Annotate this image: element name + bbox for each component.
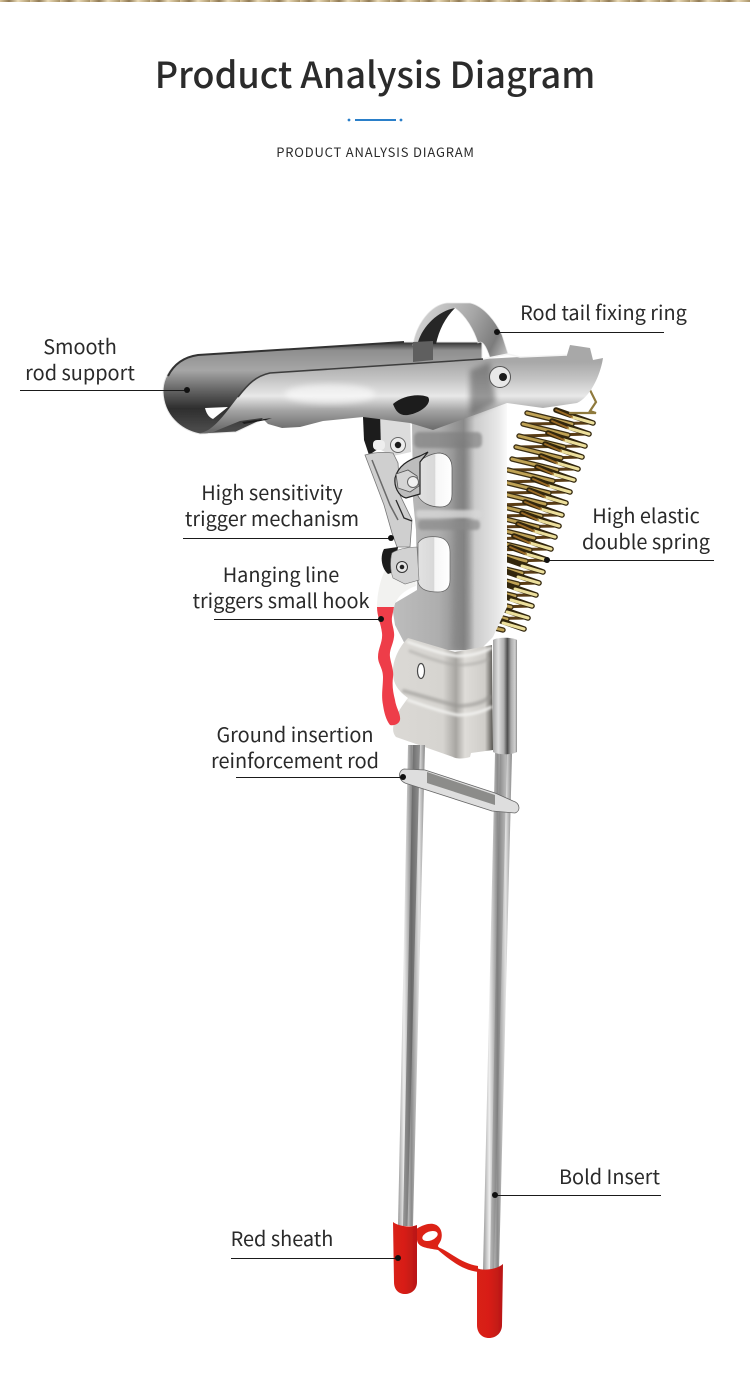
title: Product Analysis Diagram [155, 47, 595, 99]
callout: red sheath: Red sheath [231, 1223, 333, 1252]
callout: trigger mechanism: trigger mechanism [185, 503, 359, 532]
callout: rod tail fixing ring [494, 297, 687, 335]
callout: small hook: triggers small hook [192, 585, 370, 614]
lower window [418, 537, 450, 592]
body rib middle [416, 510, 482, 530]
shell underside slit [242, 418, 272, 424]
shell rim [483, 354, 567, 359]
main body upper [393, 395, 507, 650]
top decorative strip [0, 0, 750, 2]
body rib upper [414, 432, 482, 448]
callout: double spring [544, 500, 714, 563]
shell top dark rim [238, 359, 483, 397]
callout: trigger mechanism: High sensitivity [201, 477, 343, 506]
shell bolt [490, 366, 510, 388]
trigger nut bracket [395, 452, 428, 498]
callout: smooth rod support [20, 331, 190, 393]
upper window [418, 453, 452, 507]
rods [398, 745, 512, 1270]
lower body ribs [404, 642, 491, 715]
callout: red sheath [231, 1223, 401, 1261]
soft vertical body shadow [452, 440, 470, 650]
callout: bold insert: Bold Insert [559, 1161, 661, 1190]
callout: rod tail fixing ring: Rod tail fixing ring [520, 297, 687, 326]
shell highlight [285, 384, 375, 404]
rod support: front shell [200, 345, 603, 433]
callout: trigger mechanism [183, 477, 394, 541]
lower body [393, 638, 493, 758]
rod tail fixing ring [413, 303, 508, 362]
callout: small hook: Hanging line [223, 559, 339, 588]
rod support: back trough [163, 342, 482, 434]
callout: smooth rod support: rod support [25, 357, 135, 386]
callout: small hook [192, 559, 384, 622]
mechanism upper plate [363, 412, 411, 456]
trough top dark rim [168, 342, 404, 376]
red hook handle [377, 607, 400, 725]
shell dark opening [393, 395, 429, 415]
spring hook wire [570, 388, 596, 413]
hook lever [377, 547, 419, 607]
callout: smooth rod support: Smooth [43, 331, 117, 360]
callout: reinforcement rod [211, 719, 406, 780]
callout: double spring: High elastic [592, 500, 700, 529]
title divider [348, 119, 402, 121]
callout: double spring: double spring [582, 526, 710, 555]
spring [458, 388, 596, 630]
body slot [418, 664, 424, 678]
callout: reinforcement rod: reinforcement rod [211, 745, 379, 774]
callout: reinforcement rod: Ground insertion [216, 719, 374, 748]
product illustration: fishing rod holder [163, 303, 603, 1338]
left red sheath [393, 1222, 417, 1294]
reinforcement tube [493, 638, 517, 754]
trigger arm [365, 452, 428, 547]
trough inner opening [205, 407, 228, 419]
subtitle: PRODUCT ANALYSIS DIAGRAM [276, 142, 475, 161]
red sheath strap [408, 1224, 478, 1272]
cross plate [399, 769, 519, 813]
shell right shading [470, 362, 496, 416]
callout: bold insert [492, 1161, 661, 1198]
right red sheath [477, 1264, 503, 1338]
